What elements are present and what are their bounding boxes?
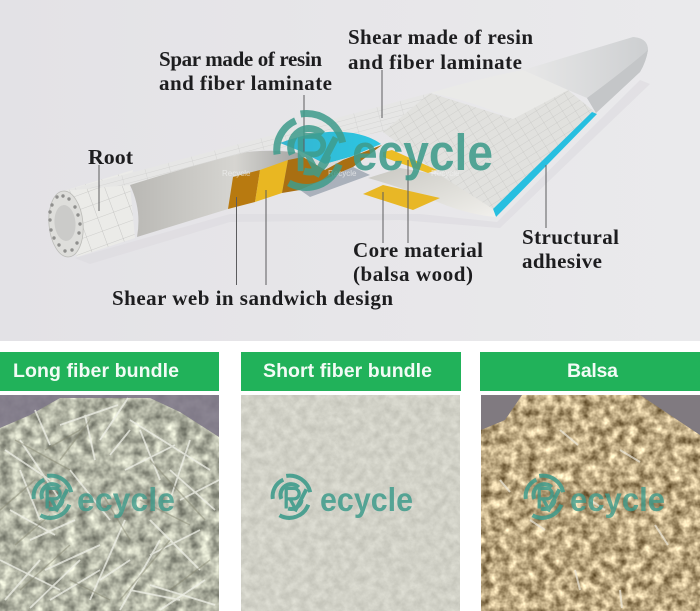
header: balsa: Balsa bbox=[567, 360, 618, 382]
label: shear web: Shear web in sandwich design bbox=[112, 286, 393, 310]
label: structural adhesive bbox=[522, 165, 619, 273]
label: spar: and fiber laminate bbox=[159, 71, 332, 95]
small faint watermarks bbox=[222, 169, 460, 178]
watermark: long fiber panel bbox=[34, 476, 175, 518]
small faint watermarks: Recycle bbox=[328, 169, 357, 178]
root tube outer skin bbox=[63, 93, 430, 257]
blade mid grid surface bbox=[383, 90, 596, 210]
header: long fiber bundle: Long fiber bundle bbox=[13, 360, 179, 382]
header: short fiber bundle bbox=[241, 352, 461, 391]
panel: balsa bbox=[480, 352, 700, 611]
label: core material: (balsa wood) bbox=[353, 262, 473, 286]
watermark: balsa panel: ecycle bbox=[570, 481, 665, 518]
watermark: short fiber panel: ecycle bbox=[320, 481, 413, 518]
blade underside bbox=[368, 168, 496, 217]
small faint watermarks: Recycle bbox=[431, 169, 460, 178]
label: core material: Core material bbox=[353, 238, 483, 262]
root end ring with bolt holes bbox=[46, 190, 86, 258]
grey-blue spar base plate bbox=[300, 167, 370, 197]
label: structural adhesive: Structural bbox=[522, 225, 619, 249]
header: long fiber bundle bbox=[0, 352, 219, 391]
brown shear web rear section bbox=[282, 145, 382, 193]
label: shear web bbox=[112, 190, 393, 310]
cyan spar cap bbox=[280, 132, 381, 164]
label: shear: and fiber laminate bbox=[348, 50, 522, 74]
grey blade tip bbox=[523, 37, 648, 113]
background panel: blade diagram area bbox=[0, 0, 700, 341]
watermark: balsa panel bbox=[526, 476, 665, 518]
yellow shear web section bbox=[255, 160, 288, 202]
label: shear bbox=[348, 25, 533, 118]
label: spar: Spar made of resin bbox=[159, 47, 322, 71]
blade illustration bbox=[46, 37, 650, 264]
tip trailing strip bbox=[587, 50, 648, 113]
upper yellow core bbox=[383, 150, 437, 173]
large watermark: Recycle: ecycle bbox=[352, 124, 493, 181]
white laminate panel bbox=[430, 70, 568, 119]
small faint watermarks: Recycle bbox=[222, 169, 251, 178]
photo: balsa chips bbox=[481, 395, 700, 611]
photo: long fibers bbox=[0, 395, 219, 611]
label: core material bbox=[353, 160, 483, 286]
cut-away interior bbox=[130, 151, 340, 237]
header: short fiber bundle: Short fiber bundle bbox=[263, 360, 432, 382]
blade ground shadow bbox=[75, 80, 650, 264]
watermark: short fiber panel bbox=[273, 476, 413, 518]
label: root bbox=[88, 145, 133, 211]
label: root: Root bbox=[88, 145, 133, 169]
label: spar bbox=[159, 47, 332, 152]
brown shear web section bbox=[228, 170, 260, 209]
label: shear: Shear made of resin bbox=[348, 25, 533, 49]
cyan structural adhesive strip bbox=[493, 112, 597, 217]
watermark: long fiber panel: ecycle bbox=[77, 481, 175, 518]
grey strip under spar bbox=[296, 150, 350, 170]
photo: short fibers bbox=[241, 395, 460, 611]
lower yellow balsa core bbox=[363, 185, 440, 210]
panel: short fiber bundle bbox=[241, 352, 461, 611]
header: balsa bbox=[480, 352, 700, 391]
large watermark: Recycle bbox=[277, 114, 493, 187]
panel: long fiber bundle bbox=[0, 352, 219, 611]
label: structural adhesive: adhesive bbox=[522, 249, 602, 273]
